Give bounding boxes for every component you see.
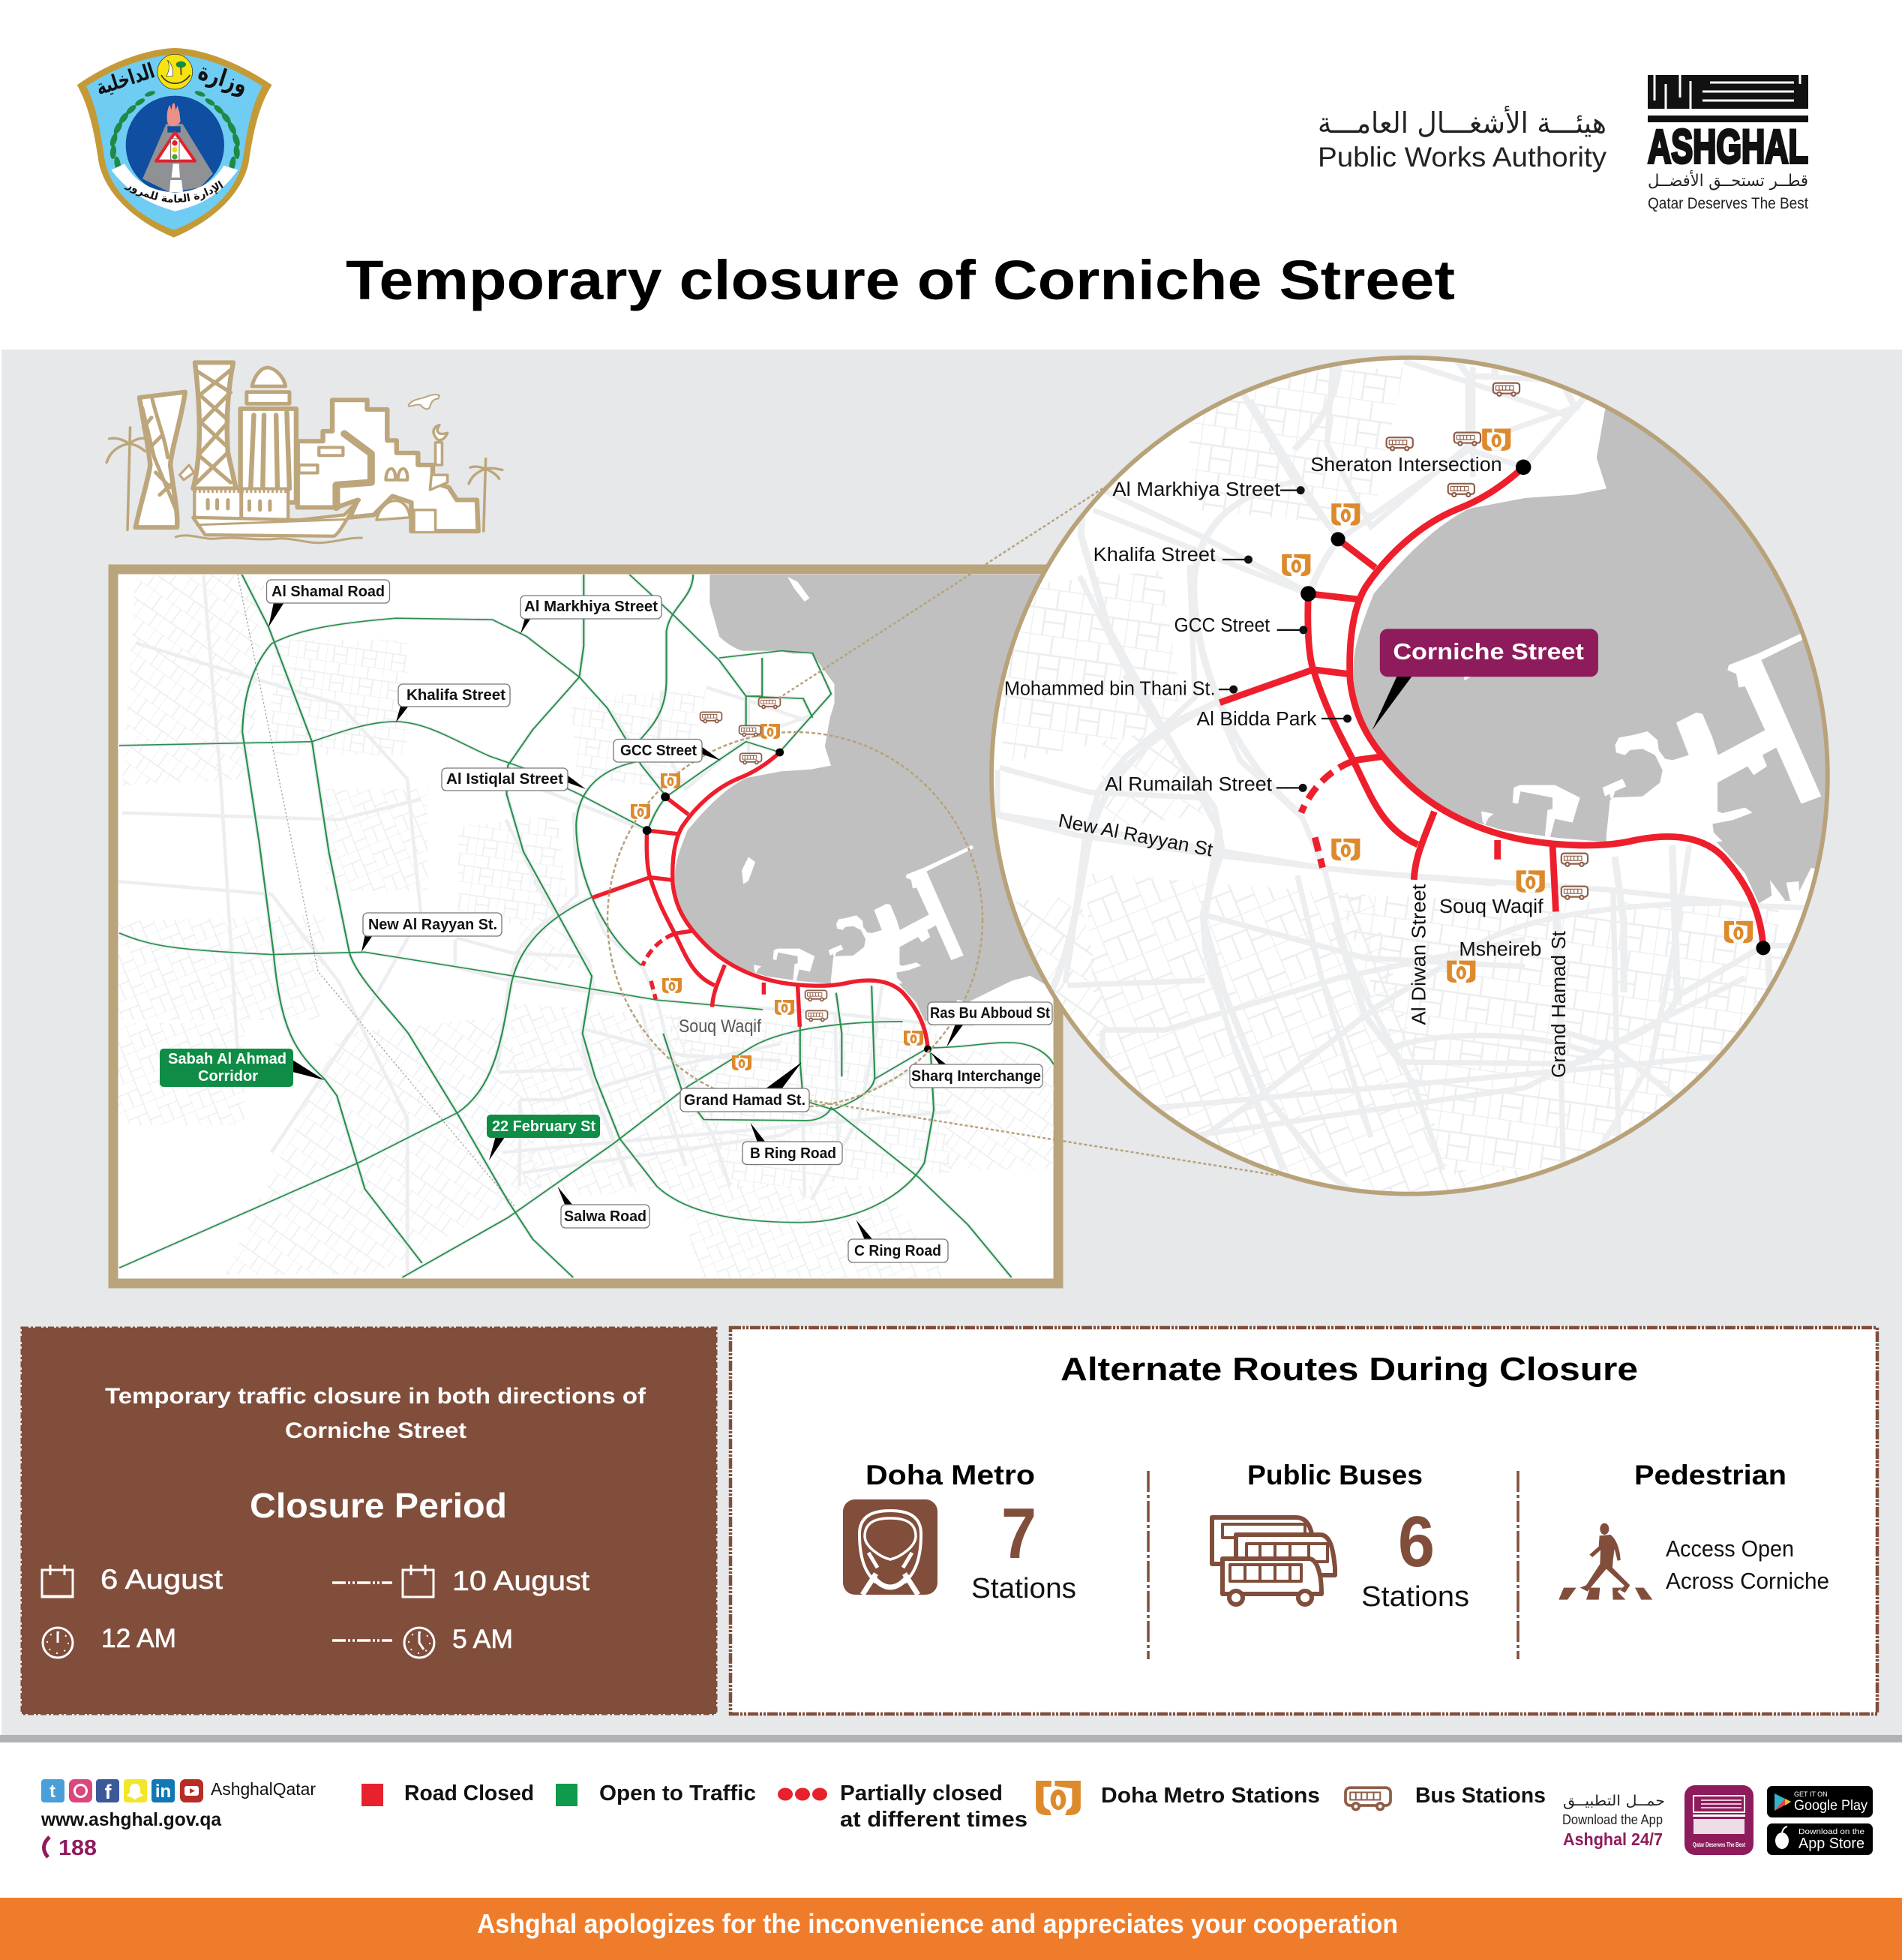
social icons: t: [50, 1781, 56, 1802]
label: Al Shamal Road: [267, 580, 390, 627]
label: Sabah Al Ahmad Corridor: [160, 1049, 325, 1087]
street names: Mohammed bin Thani St.: [1004, 678, 1215, 699]
footer banner: [0, 1898, 1902, 1960]
legend: bus stations: Bus Stations: [1415, 1784, 1546, 1808]
social icons: [41, 1779, 203, 1803]
heading: Alternate Routes During Closure: [1060, 1351, 1638, 1388]
logo: Ashghal: قطــر تستحــق الأفضــل: [1648, 170, 1808, 191]
social icons: in: [155, 1781, 171, 1802]
label: New Al Rayyan St.: New Al Rayyan St.: [368, 917, 497, 933]
footer: social media: 188: [58, 1836, 97, 1860]
label: Salwa Road: Salwa Road: [564, 1208, 646, 1225]
column: Doha Metro: 7: [1001, 1493, 1036, 1574]
street names: Msheireb: [1459, 939, 1541, 960]
street names: Al Bidda Park: [1197, 709, 1317, 730]
logo: Ashghal: ASHGHAL: [1648, 121, 1808, 173]
start date: 6 August: [100, 1564, 224, 1595]
open roads in green: [119, 574, 1054, 1277]
logo: Public Works Authority wordmark: [1318, 105, 1607, 173]
logo: traffic department shield: الإدارة العامة للمرور: [124, 180, 224, 203]
app download text: Download the App: [1562, 1812, 1663, 1827]
illustration: Doha skyline: [106, 362, 502, 543]
icon: metro train: [843, 1499, 938, 1595]
badge: App Store: Download on the: [1798, 1828, 1865, 1836]
panel: zoomed circle map: [989, 356, 1830, 1196]
legend: partially closed: at different times: [840, 1808, 1028, 1832]
callout: Corniche Street: Corniche Street: [1393, 638, 1584, 665]
street names: [1004, 455, 1570, 1078]
label: B Ring Road: [742, 1123, 842, 1164]
footer: social media: [40, 1779, 316, 1860]
icon: clock start: [43, 1628, 73, 1658]
column: Doha Metro: Doha Metro: [866, 1460, 1035, 1490]
badge: Google Play: Google Play: [1794, 1798, 1868, 1814]
label: Ras Bu Abboud St: [928, 1002, 1052, 1047]
legend: road closed: Road Closed: [404, 1781, 534, 1805]
street names: Grand Hamad St: [1549, 931, 1570, 1078]
legend: bus stations: [1346, 1784, 1546, 1810]
icon: clock end: [404, 1628, 434, 1658]
label: Sharq Interchange: [910, 1052, 1042, 1088]
closure description: Temporary traffic closure in both directions of: [105, 1384, 646, 1409]
badge: App Store: App Store: [1798, 1835, 1864, 1852]
footer: social media: www.ashghal.gov.qa: [40, 1809, 222, 1830]
label: Al Markhiya Street: [520, 596, 662, 634]
app download text: Ashghal 24/7: [1563, 1829, 1663, 1849]
title: Temporary closure of Corniche Street: [346, 249, 1455, 311]
column: Public Buses: Stations: [1361, 1581, 1469, 1613]
panel: closure details: [22, 1328, 716, 1714]
icon: calendar end: [403, 1565, 434, 1597]
label: Al Markhiya Street: Al Markhiya Street: [524, 599, 658, 615]
logo: traffic department shield: [76, 48, 272, 238]
map metro station icons: [631, 724, 923, 1070]
circle metro icons: [1282, 428, 1753, 983]
column: Pedestrian: Access Open: [1666, 1535, 1794, 1562]
callout: Corniche Street: [1372, 629, 1598, 730]
footer divider strip: [0, 1735, 1902, 1742]
logo: Public Works Authority wordmark: Public Works Authority: [1318, 142, 1607, 173]
legend: metro stations: Doha Metro Stations: [1101, 1784, 1320, 1808]
panel: alternate routes: [730, 1328, 1877, 1714]
column: Pedestrian: Across Corniche: [1666, 1568, 1829, 1594]
closed roads: [1220, 467, 1763, 948]
label: C Ring Road: [848, 1220, 948, 1262]
dividers: [1148, 1471, 1518, 1659]
logo: Ashghal: [1648, 75, 1808, 212]
label: Sabah Al Ahmad Corridor: Corridor: [198, 1068, 258, 1085]
footer banner: Ashghal apologizes for the inconvenience and appreciates your cooperation: [477, 1908, 1398, 1939]
label: 22 February St: [487, 1115, 600, 1160]
street names: Al Rumailah Street: [1105, 774, 1272, 795]
circle bus icons: [1387, 383, 1588, 899]
legend: partially closed: [778, 1781, 1028, 1832]
circle outline: [992, 358, 1828, 1194]
icon: buses: [1212, 1517, 1335, 1604]
column: Doha Metro: Stations: [971, 1573, 1076, 1604]
app icon: Ashghal 24/7: [1684, 1785, 1754, 1855]
label: C Ring Road: C Ring Road: [854, 1243, 941, 1259]
column: Public Buses: Public Buses: [1247, 1460, 1423, 1490]
connector dotted lines: [778, 482, 1277, 1175]
column: Public Buses: [1212, 1460, 1469, 1613]
label: Salwa Road: [558, 1187, 650, 1228]
label: New Al Rayyan St.: [362, 913, 502, 952]
label: Sharq Interchange: Sharq Interchange: [911, 1068, 1041, 1085]
badge: Google Play: GET IT ON: [1794, 1790, 1828, 1798]
street names: Khalifa Street: [1094, 545, 1215, 566]
legend: open to traffic: Open to Traffic: [599, 1781, 756, 1805]
start time: 12 AM: [101, 1624, 176, 1653]
logo: Public Works Authority wordmark: هيئـــة الأشغـــال العامـــة: [1318, 105, 1606, 140]
grey content band: [2, 350, 1902, 1735]
label: GCC Street: [614, 740, 721, 762]
closure end points: [643, 749, 932, 1053]
icon: calendar start: [41, 1565, 74, 1597]
dashed zoom circle: [608, 732, 982, 1107]
app download text: [1562, 1793, 1665, 1849]
label: Grand Hamad St.: [680, 1062, 809, 1112]
end time: 5 AM: [452, 1625, 513, 1654]
label: 22 February St: 22 February St: [492, 1118, 596, 1135]
street names: Al Diwan Street: [1409, 884, 1430, 1025]
closed road in red: [592, 752, 928, 1049]
column: Doha Metro: [843, 1460, 1076, 1604]
column: Pedestrian: Pedestrian: [1634, 1460, 1786, 1490]
map panel frame: [113, 569, 1058, 1283]
street names: Sheraton Intersection: [1310, 455, 1502, 476]
street names: Al Markhiya Street: [1112, 479, 1280, 500]
label: Ras Bu Abboud St: Ras Bu Abboud St: [930, 1005, 1050, 1022]
map callout labels: [160, 580, 1052, 1262]
map bus station icons: [700, 698, 827, 1022]
label: Al Shamal Road: Al Shamal Road: [272, 584, 385, 600]
pointer lines with dots: [1219, 487, 1351, 791]
connectors: [332, 1583, 392, 1640]
badge: Google Play: [1767, 1786, 1873, 1817]
badge: App Store: [1767, 1823, 1873, 1855]
street names: Souq Waqif: [1439, 896, 1544, 917]
label: GCC Street: GCC Street: [620, 743, 697, 759]
logo Arabic wording: وزارة: [195, 57, 251, 99]
street names: GCC Street: [1174, 615, 1270, 636]
social icons: f: [105, 1781, 112, 1803]
logo: Ashghal: Qatar Deserves The Best: [1648, 195, 1808, 212]
label: Khalifa Street: Khalifa Street: [406, 687, 506, 704]
label: Sabah Al Ahmad Corridor: Sabah Al Ahmad: [168, 1051, 286, 1067]
label: Al Istiqlal Street: [442, 768, 586, 791]
footer: social media: AshghalQatar: [211, 1779, 316, 1799]
panel: overview road map: [118, 575, 1054, 1278]
icon: phone: [44, 1837, 50, 1857]
end date: 10 August: [452, 1565, 590, 1596]
legend: metro stations: [1036, 1781, 1320, 1815]
app download text: حمــل التطبيــق: [1563, 1793, 1665, 1809]
logo: traffic department shield: الداخلية: [93, 58, 158, 101]
street names: New Al Rayyan St: [1057, 810, 1214, 860]
label: Al Istiqlal Street: Al Istiqlal Street: [446, 771, 563, 788]
map label: Souq Waqif: Souq Waqif: [679, 1016, 761, 1037]
closure end dots: [1300, 460, 1770, 955]
label: Khalifa Street: [396, 684, 510, 722]
label: B Ring Road: B Ring Road: [750, 1145, 836, 1162]
gray rail corridor: [238, 574, 514, 1206]
label: Grand Hamad St.: Grand Hamad St.: [684, 1092, 806, 1109]
app icon: Ashghal 24/7: Qatar Deserves The Best: [1693, 1841, 1745, 1848]
icon: pedestrian crossing: [1558, 1523, 1652, 1600]
legend: partially closed: Partially closed: [840, 1781, 1003, 1805]
panel: closure details: Corniche Street: [285, 1418, 466, 1443]
column: Pedestrian: [1558, 1460, 1829, 1600]
closure period heading: Closure Period: [250, 1486, 507, 1525]
column: Public Buses: 6: [1398, 1502, 1435, 1582]
